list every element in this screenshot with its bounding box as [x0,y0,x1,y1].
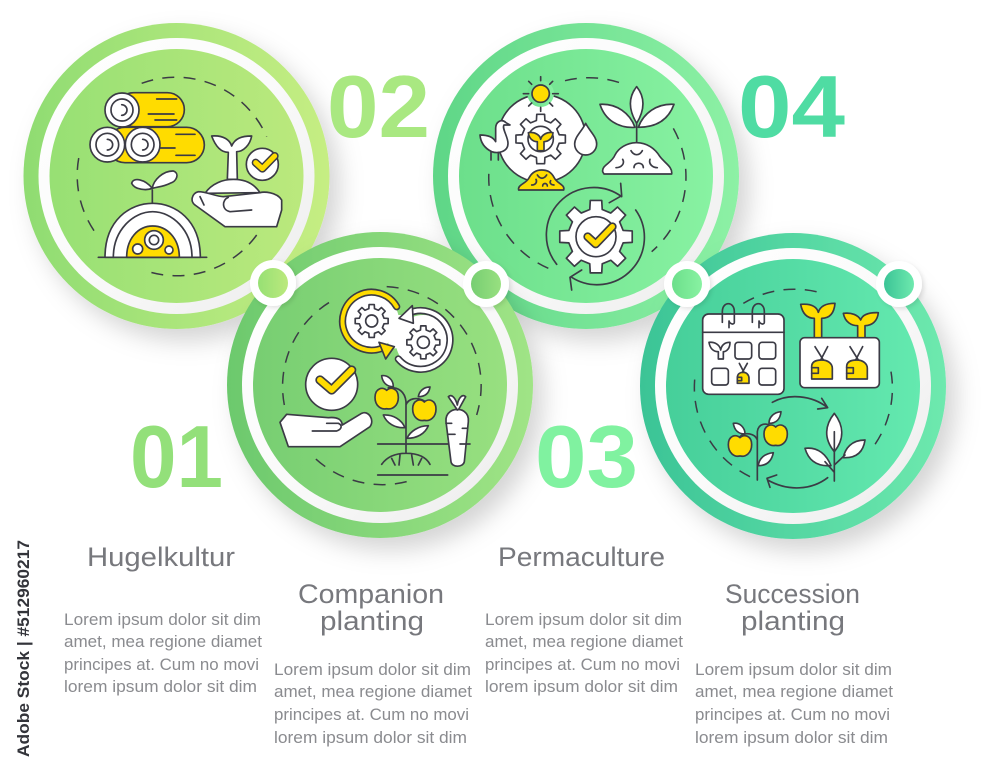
heading: Companion planting: Companion [298,579,444,609]
text block: Hugelkultur description: lorem ipsum dolor sit dim [64,678,257,696]
heading: Succession planting: planting [741,606,845,636]
text block: Companion planting description: principes at. Cum no movi [274,706,469,724]
step 1 circle: Hugelkultur [24,23,330,329]
number 04: 04 [738,57,845,156]
text block: Permaculture description [485,611,683,696]
text block: Succession planting description: lorem ipsum dolor sit dim [695,729,888,747]
text block: Companion planting description: lorem ipsum dolor sit dim [274,729,467,747]
text block: Permaculture description: principes at. Cum no movi [485,656,680,674]
heading: Succession planting [725,579,860,636]
heading: Hugelkultur: Hugelkultur [87,542,235,572]
text block: Permaculture description: lorem ipsum dolor sit dim [485,678,678,696]
heading: Companion planting [298,579,444,636]
heading: Succession planting: Succession [725,579,860,609]
step 3 circle: Permaculture [433,23,739,329]
text block: Succession planting description [695,661,893,747]
text block: Permaculture description: amet, mea regione diamet [485,633,683,651]
text block: Companion planting description [274,661,472,747]
heading: Companion planting: planting [320,606,424,636]
connector dots [250,260,922,307]
number 01: 01 [130,407,223,506]
number 02: 02 [327,57,430,156]
text block: Succession planting description: amet, mea regione diamet [695,683,893,701]
text block: Hugelkultur description: principes at. Cum no movi [64,656,259,674]
text block: Companion planting description: amet, mea regione diamet [274,683,472,701]
text block: Permaculture description: Lorem ipsum dolor sit dim [485,611,682,629]
number 03: 03 [535,407,638,506]
text block: Hugelkultur description [64,611,262,696]
step 4 circle: Succession planting [640,233,946,539]
text block: Hugelkultur description: Lorem ipsum dolor sit dim [64,611,261,629]
vertical stock credit: Adobe Stock | #512960217 [14,540,33,757]
text block: Companion planting description: Lorem ipsum dolor sit dim [274,661,471,679]
icon: permaculture cycle [480,77,686,290]
step 2 circle: Companion planting [227,232,533,538]
icon: logs, mound and seedling in hand [77,77,282,276]
text block: Hugelkultur description: amet, mea regione diamet [64,633,262,651]
icon: gears, hand and companion plants [280,287,481,485]
text block: Succession planting description: Lorem ipsum dolor sit dim [695,661,892,679]
text block: Succession planting description: principes at. Cum no movi [695,706,890,724]
icon: calendar, sprouts and crop cycle [694,289,892,488]
heading: Permaculture: Permaculture [498,542,665,572]
